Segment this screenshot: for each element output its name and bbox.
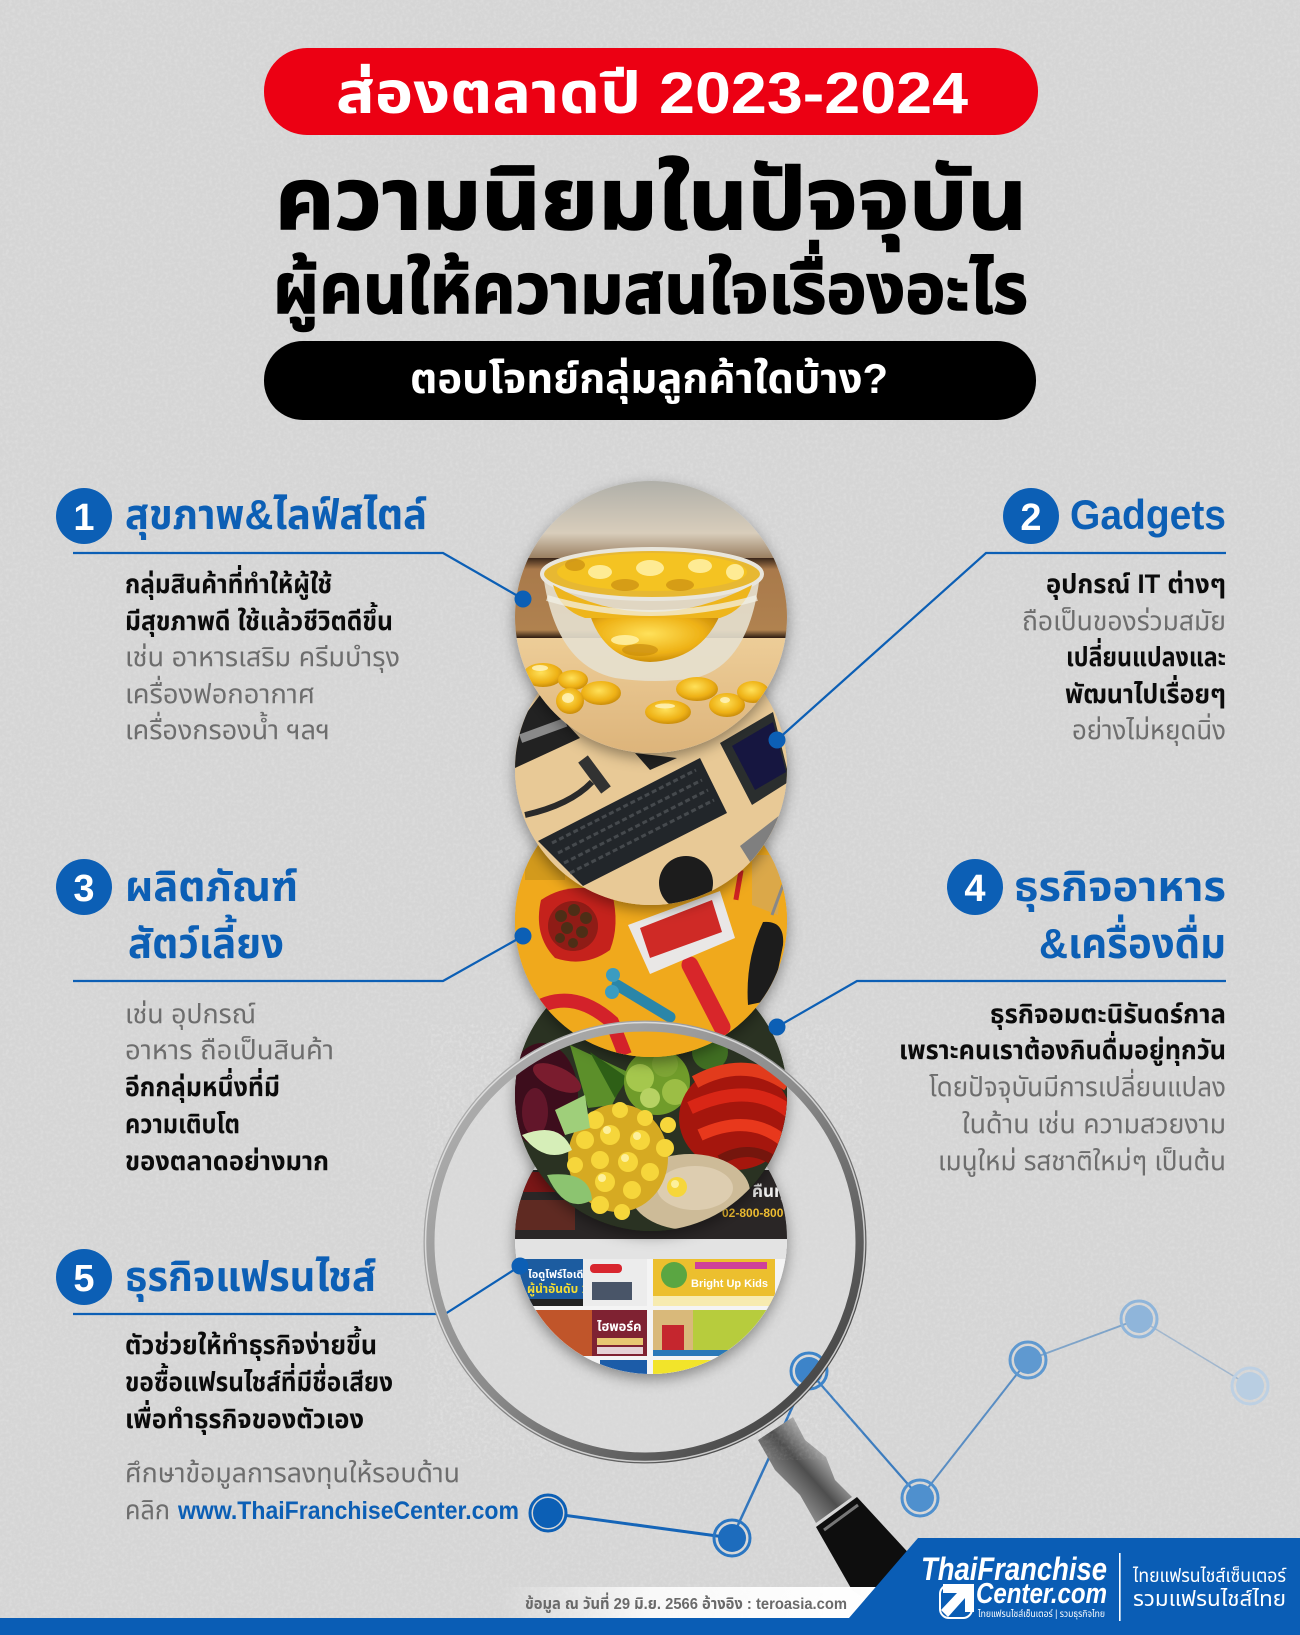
website card: blue	[513, 1259, 583, 1306]
panel: circle 1 capsules image	[510, 478, 795, 758]
number badge 3: 3	[73, 868, 95, 910]
red title pill: ส่องตลาดปี 2023-2024	[336, 61, 968, 126]
heading 1: สุขภาพ&ไลฟ์สไตล์	[125, 491, 427, 540]
blue bone toy	[617, 985, 670, 1017]
body text 3	[125, 999, 334, 1176]
source strip: ข้อมูล ณ วันที่ 29 มิ.ย. 2566 อ้างอิง : teroasia.com	[525, 1592, 847, 1614]
heading 2: Gadgets	[1070, 491, 1226, 538]
brand tagline	[1132, 1566, 1287, 1611]
body text 1: กลุ่มสินค้าที่ทำให้ผู้ใช้	[125, 565, 332, 600]
heading 3	[125, 863, 298, 967]
body text 2: ถือเป็นของร่วมสมัย	[1022, 606, 1226, 636]
panel: circle 3 pet products image	[506, 841, 796, 1070]
section 1: health and lifestyle	[56, 488, 532, 745]
pet bowl	[539, 888, 616, 962]
blue footer bar	[0, 1538, 1300, 1635]
body text 5: ตัวช่วยให้ทำธุรกิจง่ายขึ้น	[125, 1326, 377, 1361]
logo: ThaiFranchise	[921, 1551, 1107, 1587]
tablet	[720, 712, 790, 805]
body text 3: อีกกลุ่มหนึ่งที่มี	[125, 1068, 280, 1103]
body text 5: ขอซื้อแฟรนไชส์ที่มีชื่อเสียง	[125, 1363, 393, 1397]
section 4: food and beverage	[768, 859, 1226, 1177]
section 5: franchise business	[56, 1249, 528, 1525]
body text 4	[899, 999, 1226, 1177]
body text 5: เพื่อทำธุรกิจของตัวเอง	[125, 1400, 364, 1435]
panel: circle 5 franchise website image: ผู้นำอันดับ 1	[527, 1282, 589, 1297]
header title block	[264, 48, 1038, 420]
panel: circle 5 franchise website image: ไอดูโฟร์ไอเดีย	[528, 1269, 590, 1281]
body text 2: อย่างไม่หยุดนิ่ง	[1072, 713, 1226, 746]
comb	[752, 855, 782, 915]
router device	[510, 695, 580, 768]
body text 1: เครื่องฟอกอากาศ	[125, 675, 315, 709]
logo: ไทยแฟรนไชส์เซ็นเตอร์ | รวมธุรกิจไทย	[977, 1607, 1105, 1620]
call to action: คลิก	[125, 1495, 170, 1525]
connector 5	[73, 1258, 528, 1314]
mouse	[740, 816, 778, 862]
number badge 2: 2	[1020, 497, 1042, 539]
heading 4: ธุรกิจอาหาร	[1014, 863, 1226, 912]
red ring toy	[530, 1001, 625, 1055]
heading 5: ธุรกิจแฟรนไชส์	[125, 1253, 376, 1302]
body text 4: เพราะคนเราต้องกินดื่มอยู่ทุกวัน	[899, 1031, 1226, 1066]
body text 4: โดยปัจจุบันมีการเปลี่ยนแปลง	[929, 1068, 1226, 1103]
black subtitle pill: ตอบโจทย์กลุ่มลูกค้าใดบ้าง?	[410, 355, 888, 404]
section 3: pet products	[56, 859, 532, 1176]
brand tagline: รวมแฟรนไชส์ไทย	[1133, 1588, 1286, 1611]
body text 2: เปลี่ยนแปลงและ	[1066, 638, 1226, 672]
website card: white	[583, 1272, 590, 1293]
body text 2: พัฒนาไปเรื่อยๆ	[1065, 675, 1226, 709]
website card: yellow kids	[653, 1259, 775, 1306]
number badge 1: 1	[73, 497, 95, 539]
panel: circle 5 franchise website image: Bright Up Kids	[691, 1278, 768, 1290]
brand tagline: ไทยแฟรนไชส์เซ็นเตอร์	[1132, 1566, 1287, 1587]
connector 1	[73, 553, 532, 608]
body text 2: อุปกรณ์ IT ต่างๆ	[1046, 569, 1226, 600]
heading 3: สัตว์เลี้ยง	[128, 914, 284, 967]
website card row 3	[600, 1360, 647, 1374]
number badge 4: 4	[964, 868, 986, 910]
website card: green	[693, 1310, 766, 1356]
body text 1: เช่น อาหารเสริม ครีมบำรุง	[125, 642, 400, 673]
heading 3: ผลิตภัณฑ์	[125, 863, 298, 910]
number badge 5: 5	[73, 1258, 95, 1300]
body text 5	[125, 1326, 393, 1435]
number badge 1	[56, 488, 112, 544]
footer	[0, 1538, 1300, 1635]
pet brush	[690, 965, 722, 1027]
main heading line 1: ความนิยมในปัจจุบัน	[275, 152, 1027, 251]
body text 2	[1022, 569, 1226, 746]
body text 3: เช่น อุปกรณ์	[125, 999, 256, 1030]
panel: circle 5 franchise website image: ไฮพอร์ค	[597, 1319, 642, 1334]
website card: pork	[533, 1310, 592, 1356]
panel: circle 5 franchise website image: 02-800-800	[722, 1206, 784, 1220]
body text 3: ความเติบโต	[125, 1109, 240, 1139]
call to action: www.ThaiFranchiseCenter.com	[177, 1497, 519, 1525]
magnifying glass handle	[758, 1417, 915, 1610]
keyboard	[538, 758, 727, 886]
number badge 4	[947, 859, 1003, 915]
loose capsules	[523, 663, 769, 724]
section 2: gadgets	[768, 488, 1226, 748]
call to action: ศึกษาข้อมูลการลงทุนให้รอบด้าน	[125, 1458, 460, 1489]
connector 2	[768, 553, 1226, 748]
heading 4: &เครื่องดื่ม	[1039, 914, 1226, 967]
magnifying glass ring	[426, 1022, 864, 1462]
glass bowl	[543, 574, 760, 681]
source strip	[500, 1587, 876, 1618]
panel: circle 4 food image	[506, 1005, 796, 1244]
call to action	[125, 1458, 519, 1525]
body text 4: ในด้าน เช่น ความสวยงาม	[962, 1109, 1226, 1139]
panel: circle 2 keyboard gadgets image	[506, 689, 796, 918]
network line chart decoration	[530, 1301, 1268, 1556]
connector 3	[73, 928, 532, 981]
black subtitle pill	[264, 341, 1036, 420]
body text 1: เครื่องกรองน้ำ ฯลฯ	[125, 711, 330, 745]
network node seen through lens	[791, 1353, 827, 1389]
body text 3: อาหาร ถือเป็นสินค้า	[125, 1035, 334, 1065]
logo	[921, 1551, 1107, 1620]
number badge 5	[56, 1249, 112, 1305]
main heading line 2: ผู้คนให้ความสนใจเรื่องอะไร	[273, 240, 1028, 331]
body text 1: มีสุขภาพดี ใช้แล้วชีวิตดีขึ้น	[125, 602, 393, 637]
logo: Center.com	[976, 1578, 1107, 1610]
red title pill	[264, 48, 1038, 135]
panel: circle 5 franchise website image	[506, 1162, 796, 1388]
magnifying lens glass	[427, 1024, 863, 1460]
panel: circle 5 franchise website image: คืนทุน	[752, 1182, 796, 1202]
number badge 3	[56, 859, 112, 915]
cable	[525, 782, 592, 815]
number badge 2	[1003, 488, 1059, 544]
heading 4	[1014, 863, 1226, 967]
body text 1	[125, 565, 400, 745]
body text 4: ธุรกิจอมตะนิรันดร์กาล	[990, 999, 1226, 1030]
body text 4: เมนูใหม่ รสชาติใหม่ๆ เป็นต้น	[938, 1146, 1226, 1177]
lens cap	[659, 856, 713, 904]
connector 4	[768, 981, 1226, 1036]
body text 3: ของตลาดอย่างมาก	[125, 1146, 329, 1176]
icon: logo arrow	[940, 1584, 974, 1618]
